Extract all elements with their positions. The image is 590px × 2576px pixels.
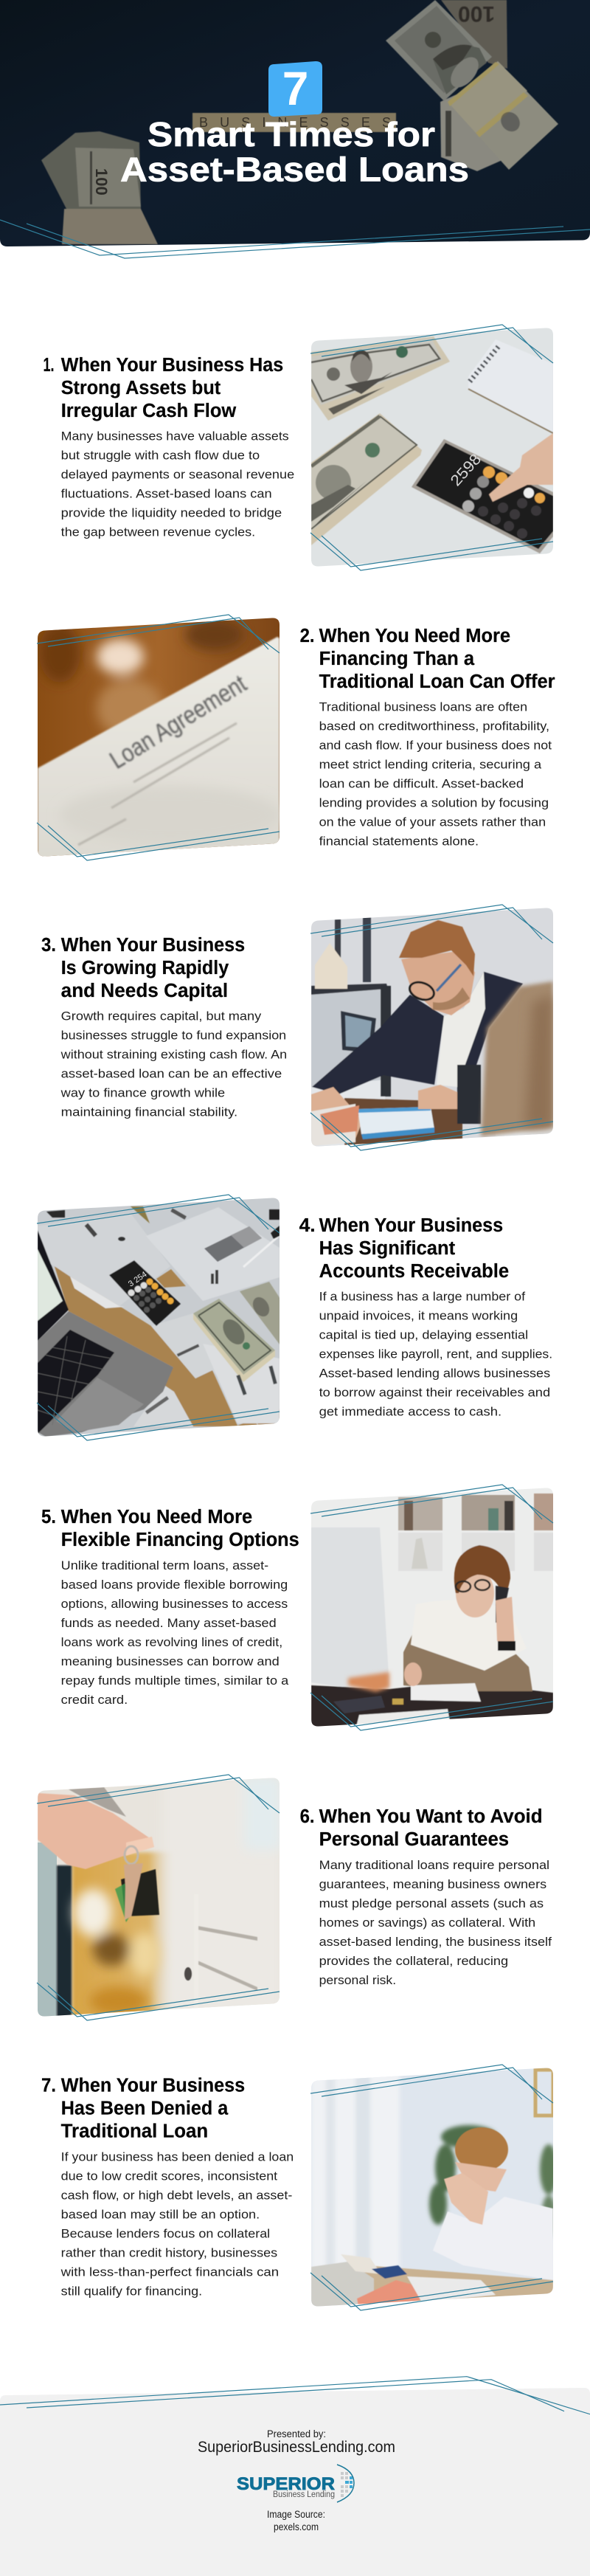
heading 5 <box>41 1507 299 1550</box>
section 5 <box>41 1485 555 1730</box>
heading 3: 3. <box>41 935 56 956</box>
body text 3 <box>60 1009 287 1119</box>
body text 5: options, allowing businesses to access <box>61 1597 288 1611</box>
body text 7: If your business has been denied a loan <box>61 2149 294 2164</box>
title: Asset-Based Loans <box>120 151 469 189</box>
heading 3: and Needs Capital <box>61 981 228 1001</box>
body text 5: Unlike traditional term loans, asset- <box>61 1558 268 1572</box>
heading 1: 1. <box>43 355 55 376</box>
footer panel <box>0 2377 590 2576</box>
body text 7 <box>60 2149 294 2298</box>
logo: Superior Business Lending: Business Lending <box>273 2490 335 2499</box>
body text 6: guarantees, meaning business owners <box>319 1877 546 1891</box>
heading 3 <box>41 935 245 1001</box>
body text 2: meet strict lending criteria, securing a <box>319 757 542 771</box>
body text 7: with less-than-perfect financials can <box>60 2265 279 2279</box>
body text 3: asset-based loan can be an effective <box>61 1066 282 1080</box>
section 6 <box>37 1775 552 2022</box>
body text 4: expenses like payroll, rent, and supplies. <box>319 1347 552 1361</box>
body text 5: repay funds multiple times, similar to a <box>61 1674 289 1688</box>
section 1 <box>43 325 553 570</box>
section 2 <box>37 615 555 860</box>
photo text: loan agreement: Loan Agreement <box>105 669 251 775</box>
heading 5: When You Need More <box>61 1507 252 1527</box>
body text 5: meaning businesses can borrow and <box>61 1654 280 1668</box>
logo: Superior Business Lending <box>237 2465 354 2502</box>
title: Smart Times for <box>148 115 435 153</box>
body text 4: get immediate access to cash. <box>319 1404 502 1418</box>
heading 2: Financing Than a <box>319 649 475 669</box>
header background photo <box>0 0 590 246</box>
body text 3: Growth requires capital, but many <box>61 1009 262 1023</box>
section 7 <box>41 2065 558 2310</box>
heading 3: Is Growing Rapidly <box>61 958 229 978</box>
body text 2 <box>319 700 552 848</box>
body text 4 <box>319 1289 552 1418</box>
footer accent lines <box>0 2377 590 2414</box>
body text 4: If a business has a large number of <box>319 1289 525 1303</box>
photo text: calculator display: 2598 <box>448 451 485 489</box>
heading 1: When Your Business Has <box>61 355 283 376</box>
heading 6 <box>300 1806 543 1850</box>
photo text: bill denomination: 100 <box>458 1 495 26</box>
heading 2 <box>300 626 555 692</box>
number 7 badge: 7 <box>282 62 308 115</box>
title <box>120 115 469 189</box>
body text 3: maintaining financial stability. <box>61 1105 237 1119</box>
image source text: pexels.com <box>274 2521 319 2532</box>
heading 2: 2. <box>300 626 315 646</box>
presented by text <box>198 2428 395 2456</box>
heading 7: 7. <box>41 2075 56 2096</box>
body text 1: the gap between revenue cycles. <box>61 525 255 539</box>
body text 2: based on creditworthiness, profitability, <box>319 719 549 733</box>
heading 4: Accounts Receivable <box>319 1261 509 1282</box>
body text 1: fluctuations. Asset-based loans can <box>61 487 272 501</box>
header accent lines <box>0 220 590 258</box>
body text 5: based loans provide flexible borrowing <box>61 1578 288 1592</box>
heading 4: When Your Business <box>319 1215 503 1236</box>
accent frame 1 <box>310 325 553 570</box>
accent frame 5 <box>310 1485 553 1730</box>
section 3 <box>41 905 553 1150</box>
presented by text: Presented by: <box>267 2428 326 2439</box>
heading 7: Traditional Loan <box>61 2121 208 2142</box>
photo 4: laptop, calculator, cash and charts <box>37 1195 281 1440</box>
photo 7: stressed woman at a table with bills <box>310 2065 558 2310</box>
photo 1: money, calculator phone and notebook <box>310 325 553 570</box>
photo text: calculator display: 3 254 <box>127 1270 149 1288</box>
heading 4 <box>299 1215 509 1282</box>
logo: Superior Business Lending: SUPERIOR <box>237 2474 335 2494</box>
heading 1: Strong Assets but <box>61 378 221 398</box>
body text 6: provides the collateral, reducing <box>319 1954 508 1968</box>
photo 2: loan agreement document <box>37 615 281 860</box>
body text 2: Traditional business loans are often <box>319 700 527 714</box>
accent frame 7 <box>310 2065 553 2310</box>
body text 5: loans work as revolving lines of credit, <box>61 1635 282 1649</box>
heading 7: Has Been Denied a <box>61 2099 229 2119</box>
photo 6: hand holding house keys <box>37 1775 281 2022</box>
body text 6: personal risk. <box>319 1973 396 1987</box>
body text 1: Many businesses have valuable assets <box>61 429 289 443</box>
photo 3: businessman reviewing a document <box>310 905 553 1150</box>
heading 5: 5. <box>41 1507 56 1527</box>
photo text: scrabble tiles: BUSINESSES <box>199 115 391 130</box>
body text 2: on the value of your assets rather than <box>319 815 546 829</box>
body text 4: capital is tied up, delaying essential <box>319 1327 528 1341</box>
body text 5 <box>61 1558 289 1707</box>
accent frame 6 <box>37 1775 280 2020</box>
body text 7: rather than credit history, businesses <box>61 2245 277 2259</box>
header banner <box>0 0 590 258</box>
body text 6: must pledge personal assets (such as <box>319 1896 544 1910</box>
body text 1 <box>61 429 294 539</box>
body text 1: delayed payments or seasonal revenue <box>61 468 294 482</box>
body text 7: still qualify for financing. <box>61 2284 202 2298</box>
body text 7: cash flow, or high debt levels, an asset- <box>61 2188 292 2202</box>
image source text: Image Source: <box>267 2509 325 2520</box>
body text 3: without straining existing cash flow. An <box>60 1047 287 1061</box>
body text 4: to borrow against their receivables and <box>319 1385 550 1399</box>
body text 3: way to finance growth while <box>60 1085 225 1099</box>
body text 6: Many traditional loans require personal <box>319 1858 549 1872</box>
body text 6: homes or savings) as collateral. With <box>319 1916 535 1930</box>
body text 4: Asset-based lending allows businesses <box>319 1366 550 1380</box>
body text 4: unpaid invoices, it means working <box>319 1308 518 1322</box>
accent frame 2 <box>37 615 280 860</box>
accent frame 3 <box>310 905 553 1150</box>
body text 6 <box>319 1858 552 1987</box>
body text 5: credit card. <box>61 1693 128 1707</box>
heading 7: When Your Business <box>61 2075 245 2096</box>
footer background <box>0 2388 590 2576</box>
body text 5: funds as needed. Many asset-based <box>61 1616 277 1630</box>
heading 2: Traditional Loan Can Offer <box>319 671 555 692</box>
body text 2: and cash flow. If your business does not <box>319 738 552 752</box>
body text 1: provide the liquidity needed to bridge <box>61 506 282 520</box>
body text 6: asset-based lending, the business itself <box>319 1935 552 1949</box>
body text 1: but struggle with cash flow due to <box>61 449 260 463</box>
body text 3: businesses struggle to fund expansion <box>61 1028 286 1042</box>
presented by text: SuperiorBusinessLending.com <box>198 2439 395 2456</box>
body text 7: Because lenders focus on collateral <box>61 2226 270 2240</box>
image source text <box>267 2509 325 2532</box>
accent frame 4 <box>37 1195 280 1440</box>
heading 4: Has Significant <box>319 1238 456 1259</box>
heading 6: When You Want to Avoid <box>319 1806 543 1827</box>
body text 2: loan can be difficult. Asset-backed <box>319 776 524 790</box>
section 4 <box>37 1195 552 1440</box>
heading 5: Flexible Financing Options <box>61 1530 299 1550</box>
heading 2: When You Need More <box>319 626 510 646</box>
body text 2: financial statements alone. <box>319 834 479 848</box>
body text 7: due to low credit scores, inconsistent <box>61 2169 277 2183</box>
heading 1 <box>43 355 283 421</box>
heading 4: 4. <box>299 1215 316 1236</box>
photo 5: woman on the phone at a desk <box>310 1485 555 1730</box>
number 7 badge <box>268 61 322 117</box>
heading 6: 6. <box>300 1806 315 1827</box>
body text 2: lending provides a solution by focusing <box>319 795 549 809</box>
heading 6: Personal Guarantees <box>319 1829 509 1850</box>
body text 7: based loan may still be an option. <box>61 2207 260 2221</box>
heading 7 <box>41 2075 245 2142</box>
heading 1: Irregular Cash Flow <box>61 401 236 421</box>
heading 3: When Your Business <box>61 935 245 956</box>
photo text: stacked bill denomination: 100 <box>92 168 111 196</box>
